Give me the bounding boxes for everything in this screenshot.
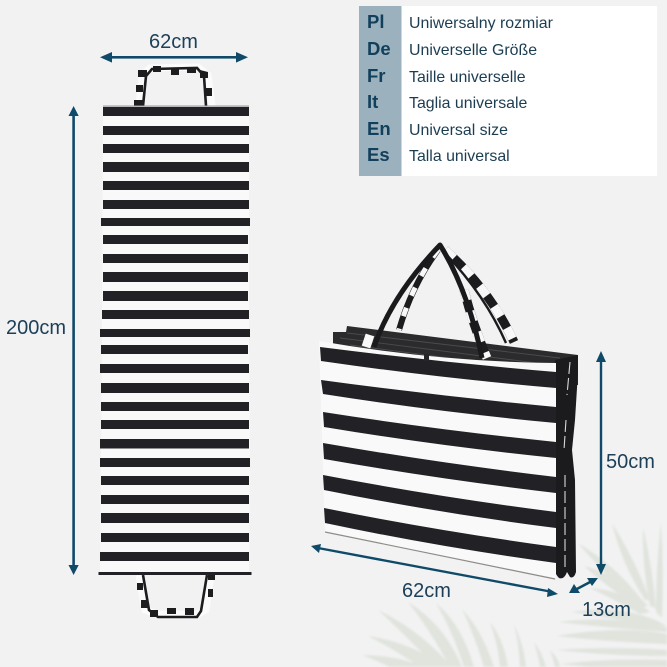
left palm frond [362, 602, 560, 667]
label: 13cm: 13cm [582, 599, 631, 621]
front handle [366, 245, 487, 358]
French row: Taille universelle [409, 69, 526, 86]
back handle [399, 250, 514, 343]
Spanish row [367, 144, 510, 165]
legend background [359, 6, 657, 176]
decorative palm leaves [362, 522, 667, 667]
folded bag [319, 245, 578, 579]
arrow: bag depth 13cm [569, 578, 598, 593]
French row [367, 65, 526, 86]
Polish row [367, 11, 554, 32]
arrow: height 50cm [596, 351, 606, 575]
side gusset [555, 355, 578, 578]
arrow: length 200cm [68, 106, 79, 575]
arrow: width 62cm [100, 52, 248, 63]
label: 50cm: 50cm [606, 451, 655, 473]
label: 62cm top: 62cm [149, 31, 198, 53]
French row: Fr [367, 65, 386, 86]
flat mat [98, 66, 252, 617]
top handle [134, 66, 212, 106]
front face [319, 341, 556, 579]
arrow: bag width 62cm [311, 544, 558, 597]
German row [367, 38, 537, 59]
Italian row [367, 91, 528, 112]
front stripes [320, 347, 556, 563]
right palm frond [556, 522, 667, 667]
mat body with stripes [98, 106, 252, 575]
bottom handle [137, 575, 215, 617]
Spanish row: Talla universal [409, 148, 510, 165]
English row [367, 118, 508, 139]
Italian row: Taglia universale [409, 95, 528, 112]
English row: Universal size [409, 122, 508, 139]
label: 62cm bag: 62cm [402, 580, 451, 602]
zipper pull [424, 354, 429, 361]
folded layers behind the bag [333, 326, 578, 385]
German row: De [367, 38, 391, 59]
label: 200cm: 200cm [6, 317, 66, 339]
language column [359, 6, 402, 176]
size legend panel [359, 6, 657, 176]
German row: Universelle Größe [409, 42, 537, 59]
Polish row: Uniwersalny rozmiar [409, 15, 554, 32]
Italian row: It [367, 91, 378, 112]
English row: En [367, 118, 391, 139]
Spanish row: Es [367, 144, 390, 165]
Polish row: Pl [367, 11, 384, 32]
